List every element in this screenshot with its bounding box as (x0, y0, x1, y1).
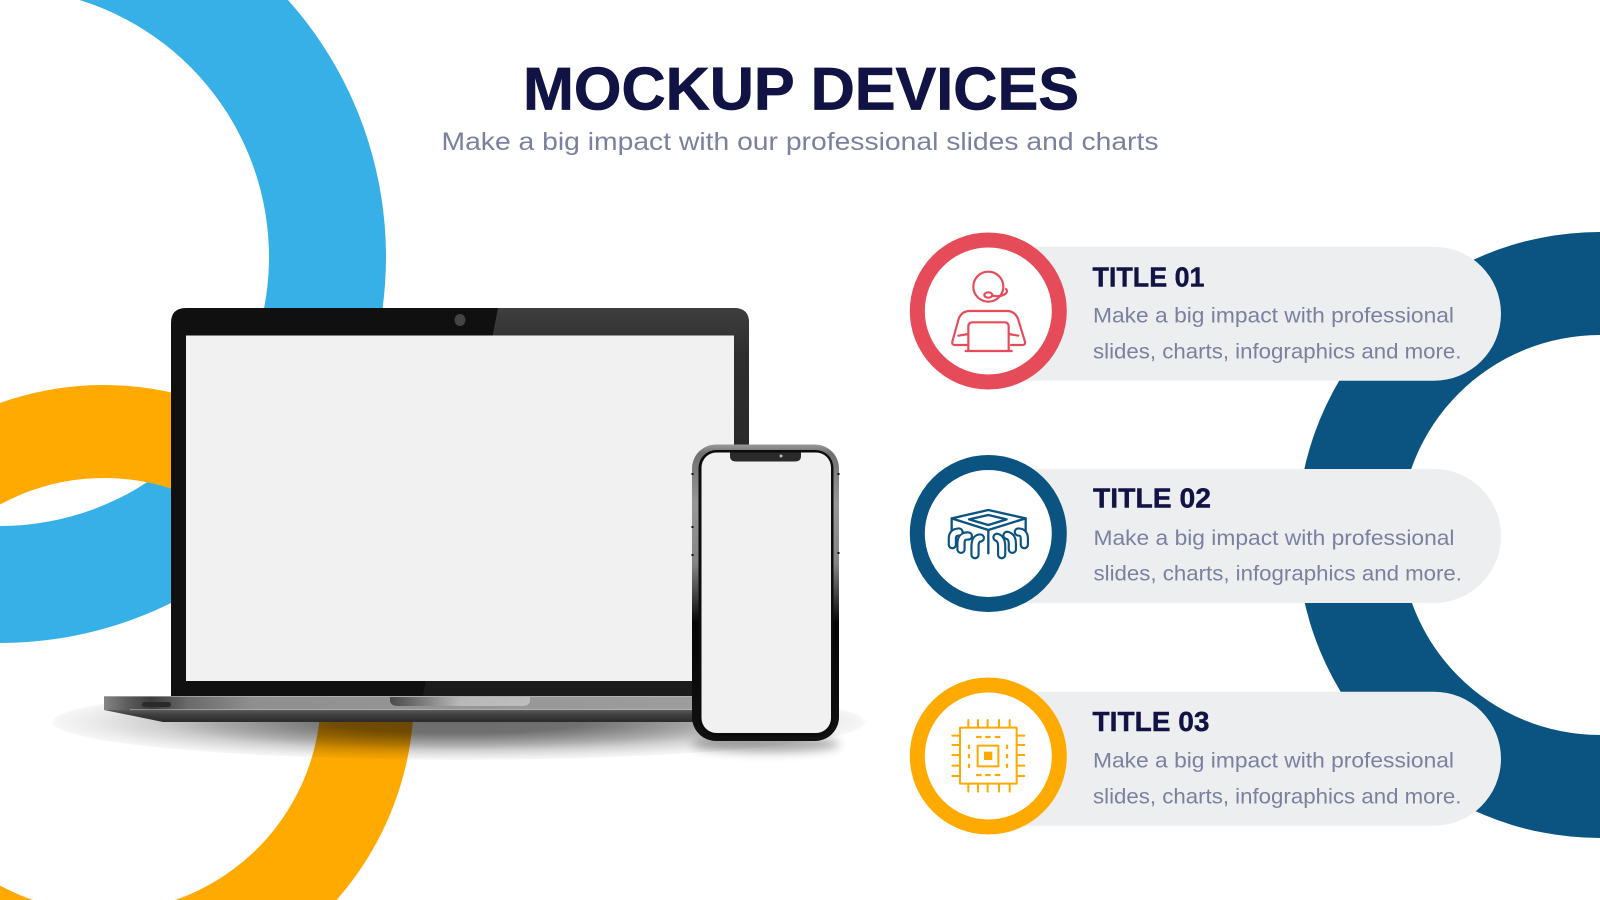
heading 3: TITLE 03 (1092, 706, 1210, 737)
front camera (780, 454, 782, 458)
laptop base top (104, 696, 700, 710)
laptop lid (171, 308, 749, 696)
text 2: slides, charts, infographics and more. (1094, 562, 1462, 586)
laptop base bottom (104, 710, 700, 722)
icon ring 3 (917, 685, 1059, 827)
ring: blue (0, 0, 386, 643)
text 2: Make a big impact with professional (1094, 526, 1454, 550)
heading 2: TITLE 02 (1093, 483, 1211, 514)
port slot (142, 702, 171, 707)
pill 1 (1000, 247, 1501, 381)
item 3 (917, 685, 1501, 827)
webcam (454, 314, 466, 326)
phone notch (730, 452, 801, 462)
text 3: Make a big impact with professional (1093, 749, 1454, 773)
phone inner bezel (698, 450, 834, 736)
text 3: slides, charts, infographics and more. (1093, 784, 1462, 808)
device shadow (51, 684, 867, 760)
side buttons (692, 473, 838, 556)
phone frame (692, 444, 839, 741)
pill 2 (1000, 469, 1501, 603)
icon: support agent with laptop (952, 272, 1025, 351)
item 1 (917, 240, 1501, 382)
icon: processor (952, 720, 1024, 792)
item 2 (917, 462, 1501, 604)
phone shadow (692, 736, 840, 752)
laptop screen (186, 336, 734, 681)
laptop (104, 308, 749, 722)
text 1: Make a big impact with professional (1093, 304, 1454, 328)
pill 3 (1000, 692, 1501, 826)
ring: orange (0, 385, 414, 900)
icon ring 2 (917, 462, 1059, 604)
subtitle: Make a big impact with our professional slides and charts (442, 128, 1158, 156)
ring: navy (1297, 232, 1600, 838)
title: MOCKUP DEVICES (523, 55, 1079, 122)
heading 1: TITLE 01 (1092, 262, 1204, 293)
phone (692, 444, 839, 741)
trackpad notch (390, 697, 530, 706)
text 1: slides, charts, infographics and more. (1093, 339, 1462, 363)
icon ring 1 (917, 240, 1059, 382)
phone screen (702, 452, 831, 733)
icon: microchip package (952, 510, 1026, 555)
lid reflection (423, 308, 749, 696)
base highlight (104, 696, 700, 710)
